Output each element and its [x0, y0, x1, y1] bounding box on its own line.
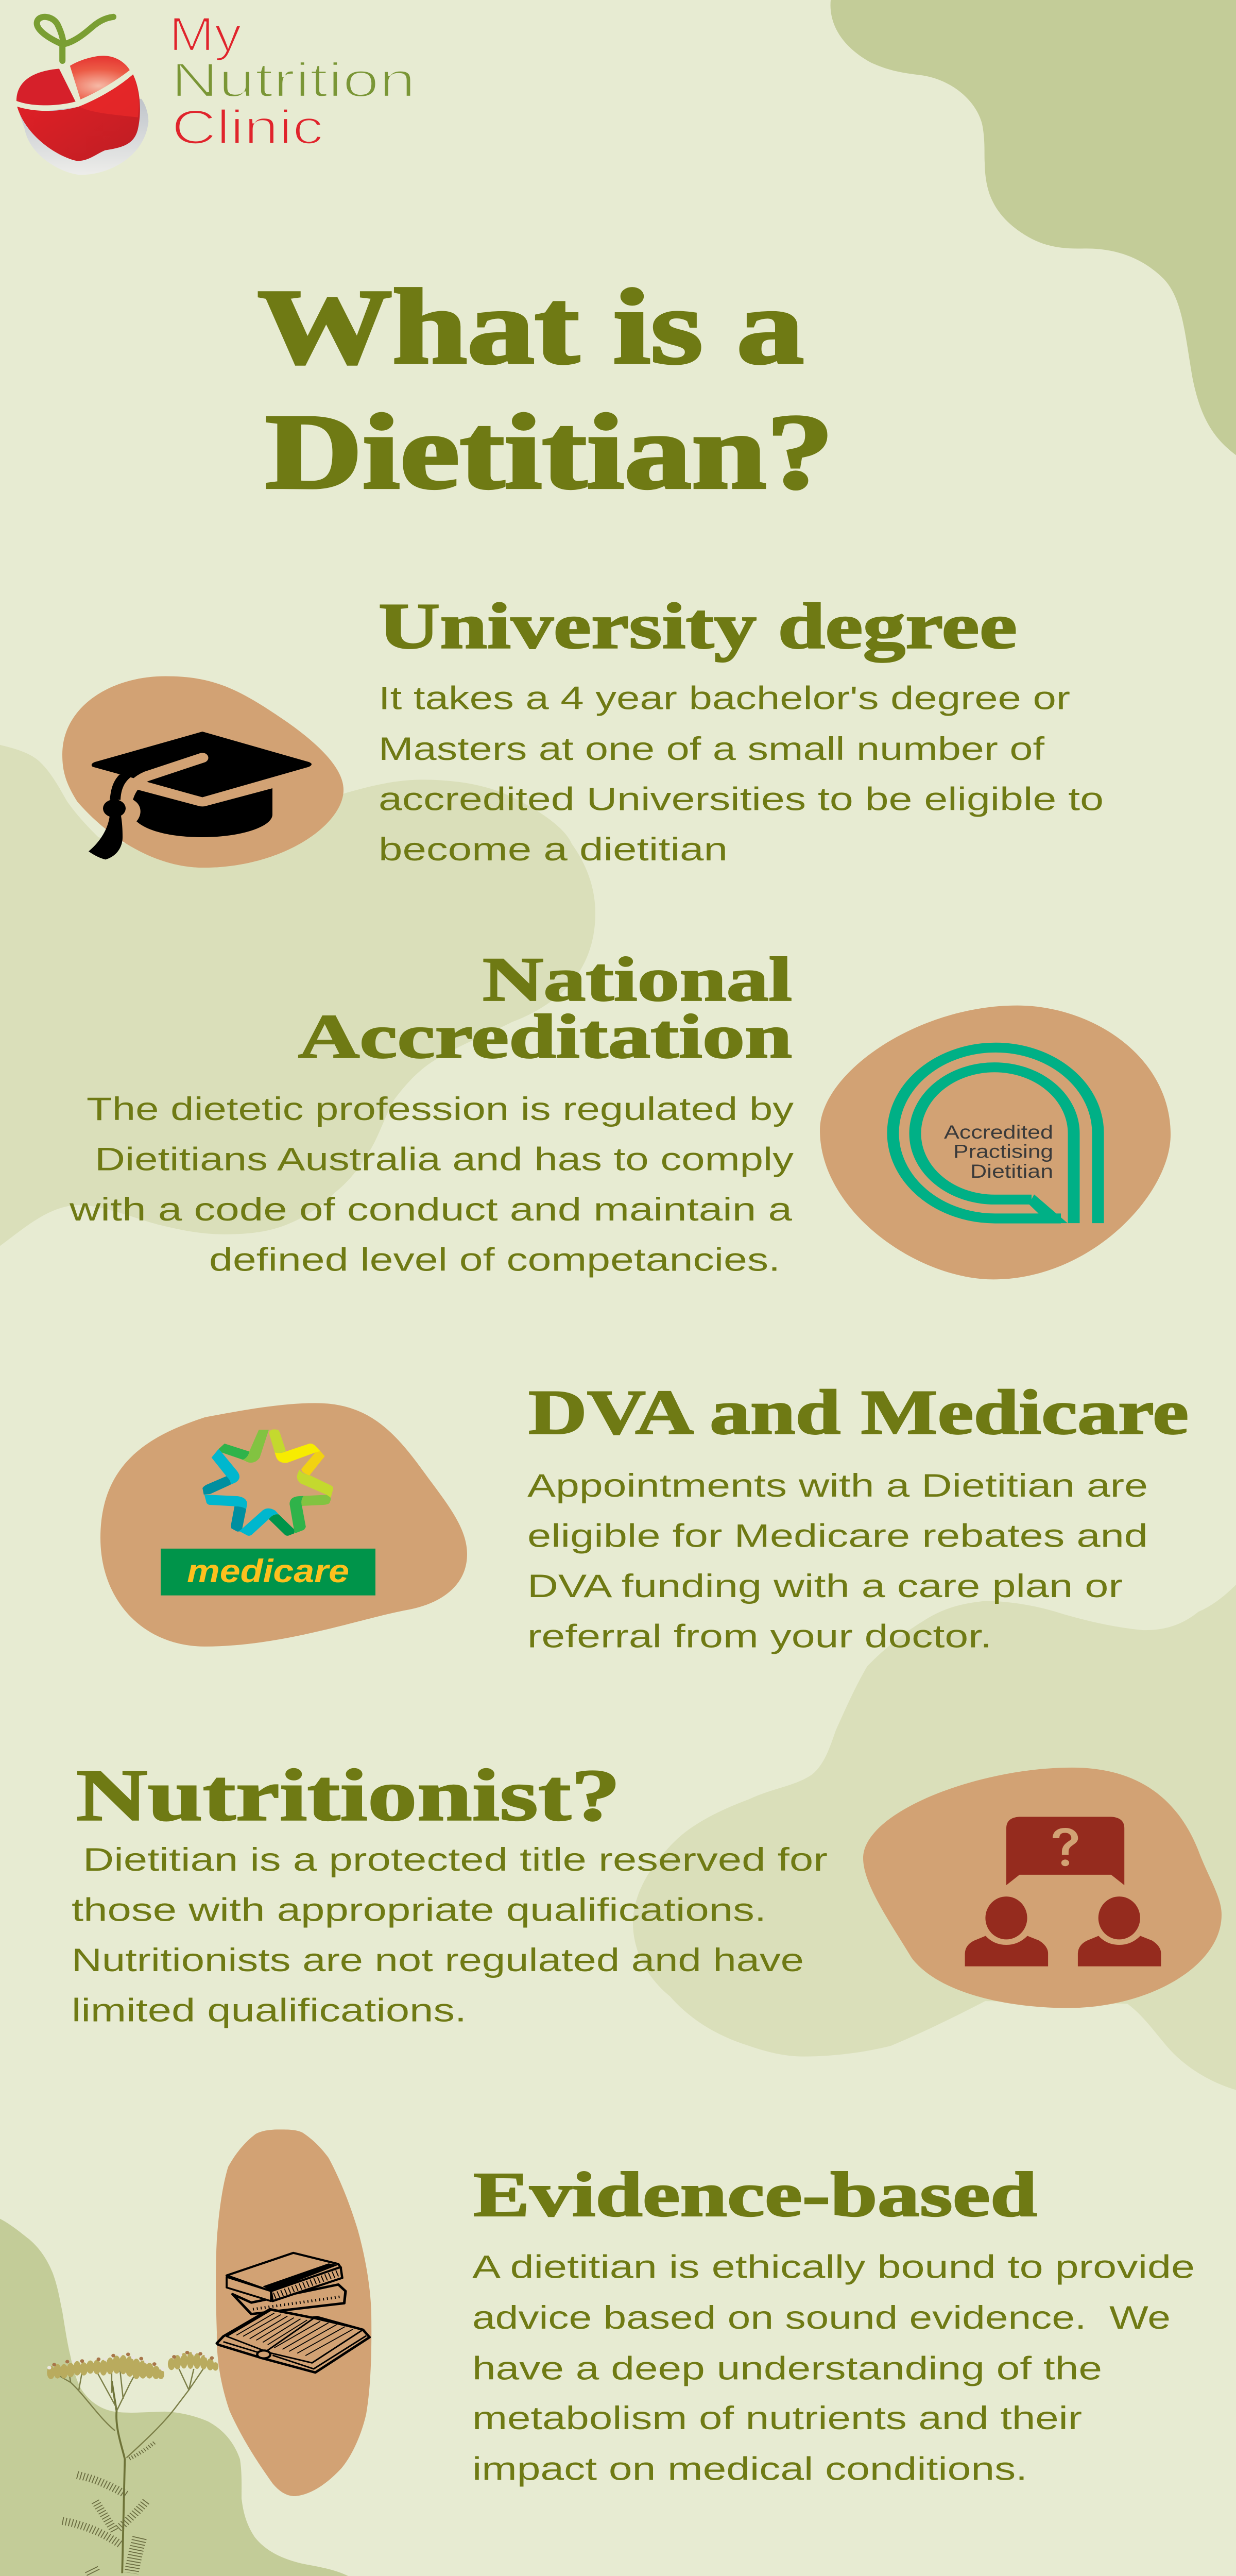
panel: university degree [62, 590, 1104, 868]
title [258, 267, 834, 511]
title: Dietitian? [265, 392, 834, 511]
panel: national accreditation [69, 945, 1171, 1279]
tan blob [820, 1006, 1171, 1279]
panel: dva and medicare [100, 1378, 1189, 1654]
body text: advice based on sound evidence. We [472, 2299, 1171, 2336]
icon: accredited practising dietitian logo: Practising [953, 1141, 1053, 1162]
body text: The dietetic profession is regulated by [87, 1091, 794, 1127]
panel: evidence-based [216, 2129, 1195, 2496]
panel: nutritionist [72, 1755, 1222, 2028]
body text [72, 1841, 828, 2028]
body text: become a dietitian [379, 831, 728, 868]
heading: Accreditation [298, 1002, 792, 1072]
heading: Evidence-based [473, 2160, 1037, 2230]
body text: A dietitian is ethically bound to provide [472, 2249, 1195, 2285]
blob: bottom left [0, 2219, 348, 2576]
logo text: Nutrition: Nutrition [171, 53, 416, 107]
body text: DVA funding with a care plan or [527, 1568, 1123, 1604]
tan blob [863, 1768, 1222, 2008]
body text: Appointments with a Dietitian are [527, 1467, 1148, 1504]
body text: defined level of competancies. [209, 1242, 780, 1278]
body text: accredited Universities to be eligible to [379, 781, 1104, 817]
body text [69, 1091, 794, 1278]
tan blob [100, 1403, 467, 1647]
icon: medicare star [202, 1429, 333, 1536]
icon: accredited practising dietitian logo: Dietitian [970, 1160, 1053, 1182]
logo text: Clinic: Clinic [171, 100, 323, 155]
body text: Masters at one of a small number of [379, 731, 1045, 767]
blob: right lower [633, 1585, 1236, 2090]
title: What is a [258, 267, 804, 386]
tan blob [216, 2129, 371, 2496]
icon: medicare badge [161, 1549, 375, 1596]
icon: graduation cap [89, 732, 312, 859]
body text: referral from your doctor. [527, 1618, 992, 1654]
blob: top right [831, 0, 1236, 455]
logo text: My: My [169, 7, 242, 61]
body text: Nutritionists are not regulated and have [72, 1942, 804, 1978]
body text [379, 680, 1104, 868]
heading [298, 945, 792, 1072]
heading: University degree [379, 590, 1017, 663]
blob: left middle [0, 745, 595, 1246]
icon: accredited practising dietitian logo [893, 1047, 1098, 1223]
body text: metabolism of nutrients and their [472, 2400, 1082, 2436]
icon: books [217, 2253, 370, 2372]
illustration: dried yarrow plant [47, 2351, 218, 2573]
body text [472, 2249, 1195, 2487]
heading: DVA and Medicare [528, 1378, 1189, 1448]
body text: Dietitians Australia and has to comply [95, 1141, 794, 1177]
icon: medicare badge: medicare [187, 1553, 349, 1589]
body text: Dietitian is a protected title reserved for [83, 1841, 828, 1877]
heading: National [483, 945, 792, 1014]
icon: accredited practising dietitian logo: Accredited [944, 1122, 1053, 1143]
body text: those with appropriate qualifications. [72, 1891, 766, 1928]
body text: have a deep understanding of the [472, 2350, 1102, 2386]
logo: My Nutrition Clinic [16, 7, 416, 175]
body text: limited qualifications. [72, 1992, 467, 2028]
tan blob [62, 676, 344, 868]
body text [527, 1467, 1148, 1654]
icon: apple [16, 17, 148, 175]
body text: with a code of conduct and maintain a [69, 1191, 792, 1228]
heading: Nutritionist? [76, 1755, 621, 1836]
body text: impact on medical conditions. [472, 2450, 1027, 2487]
body text: It takes a 4 year bachelor's degree or [379, 680, 1070, 716]
icon: two people with question bubble [965, 1817, 1161, 1967]
body text: eligible for Medicare rebates and [527, 1517, 1148, 1554]
